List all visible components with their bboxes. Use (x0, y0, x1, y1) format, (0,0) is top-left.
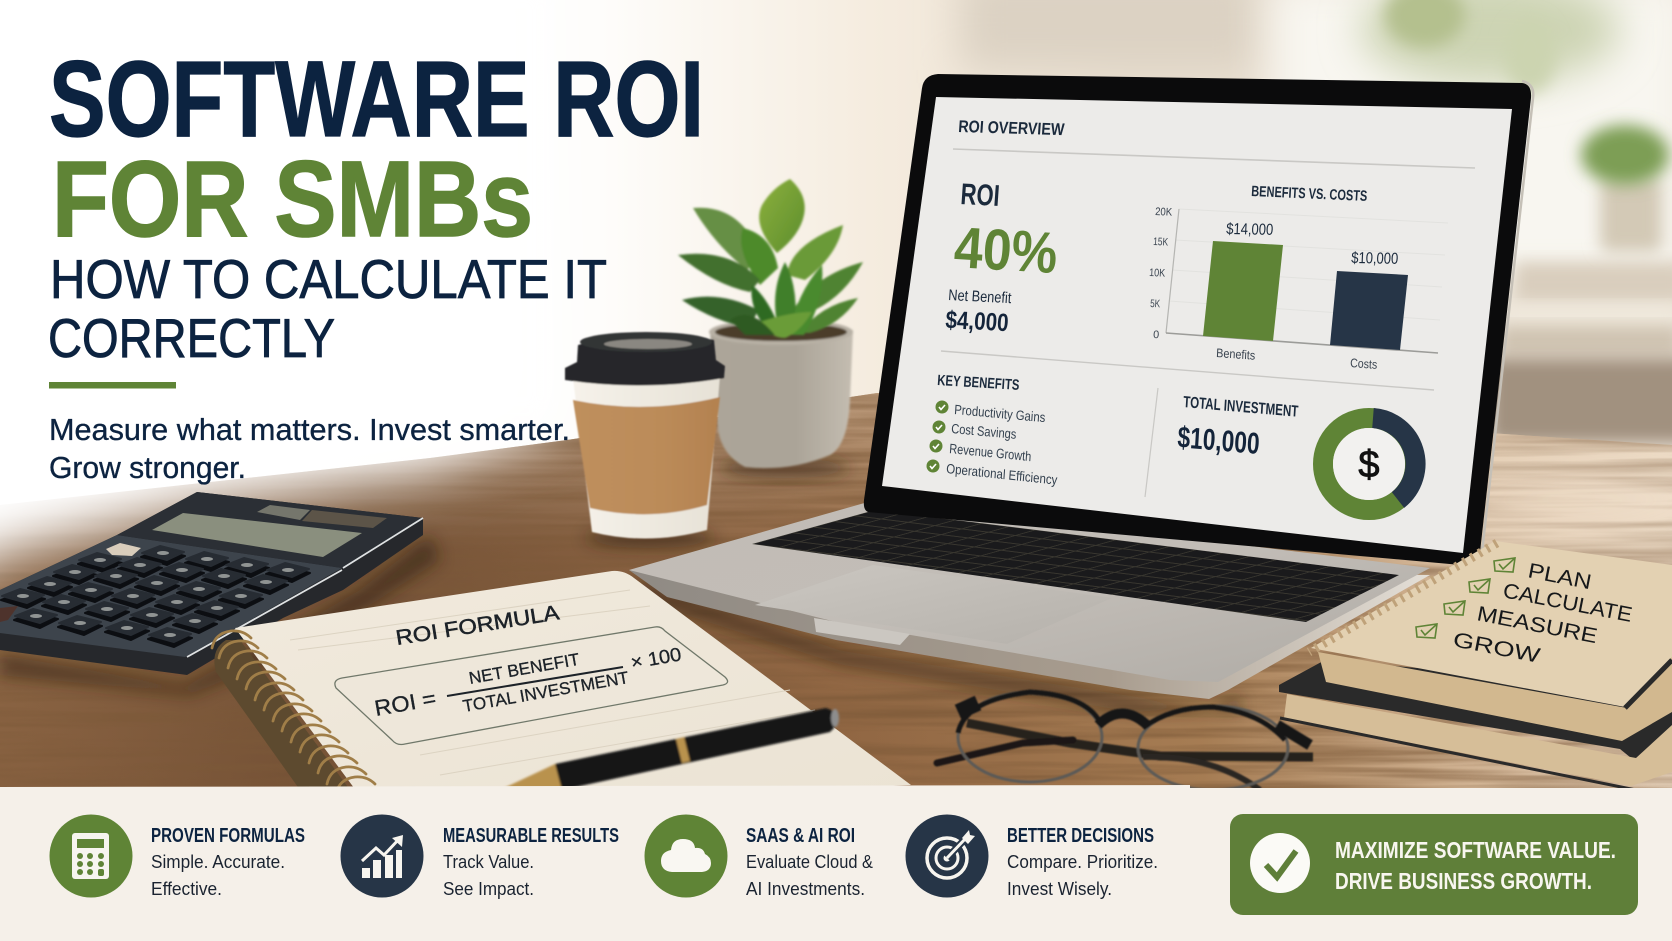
notebook with ROI formula (212, 571, 911, 800)
checklist: CALCULATE (1501, 579, 1634, 627)
laptop (629, 74, 1533, 699)
feature: SaaS and AI ROI: AI Investments. (746, 878, 865, 899)
bar chart: benefits vs costs: 10K (1149, 267, 1166, 280)
laptop bezel (864, 74, 1531, 566)
subtitle: CORRECTLY (48, 307, 335, 369)
bar chart: benefits vs costs: $10,000 (1351, 250, 1399, 268)
total investment (1177, 393, 1299, 461)
icon: check mark (1250, 833, 1310, 893)
total investment: $10,000 (1177, 421, 1261, 461)
icon: target (906, 814, 988, 898)
feature: measurable results (340, 814, 619, 899)
plant pot (709, 319, 853, 468)
tagline: Measure what matters. Invest smarter. (49, 412, 570, 447)
subtitle (48, 248, 607, 369)
bar chart: benefits vs costs: 0 (1153, 329, 1159, 341)
icon: calculator (50, 814, 132, 898)
feature: better decisions: BETTER DECISIONS (1007, 824, 1154, 847)
top book cover (1311, 541, 1672, 707)
feature: measurable results: Track Value. (443, 851, 534, 872)
checklist: MEASURE (1475, 602, 1599, 648)
feature: better decisions (906, 814, 1158, 899)
checklist: PLAN (1526, 559, 1593, 594)
laptop screen (882, 97, 1512, 553)
calculator keys (0, 543, 310, 647)
feature: SaaS and AI ROI: SAAS & AI ROI (746, 824, 855, 847)
top book pages (1318, 652, 1672, 741)
feature: better decisions: Invest Wisely. (1007, 878, 1112, 899)
key benefits list: Cost Savings (951, 421, 1017, 442)
laptop trackpad (755, 565, 1112, 645)
ROI stat: $4,000 (945, 306, 1010, 337)
bar chart: benefits vs costs: Benefits (1216, 346, 1256, 363)
key benefits list: KEY BENEFITS (937, 372, 1020, 394)
bar chart: benefits vs costs: 15K (1153, 236, 1169, 249)
calculator (0, 492, 423, 675)
bar chart: benefits vs costs: Costs (1350, 356, 1378, 372)
bar chart: benefits vs costs: BENEFITS VS. COSTS (1251, 183, 1368, 205)
stacked books (1279, 541, 1672, 790)
feature: measurable results: See Impact. (443, 878, 534, 899)
title line 2: FOR SMBs (52, 138, 533, 259)
plant (678, 179, 863, 468)
feature: proven formulas: Effective. (151, 878, 222, 899)
formula text: TOTAL INVESTMENT (461, 668, 630, 716)
key benefits list (926, 372, 1058, 488)
donut chart: $ (1358, 444, 1380, 486)
eyeglasses (937, 692, 1313, 790)
call to action (1230, 814, 1638, 915)
screen heading: ROI overview: ROI OVERVIEW (958, 117, 1066, 139)
formula text: × 100 (629, 644, 683, 674)
coffee cup (565, 332, 725, 539)
ROI stat: Net Benefit (948, 287, 1012, 307)
bar chart: benefits vs costs (1149, 183, 1448, 372)
lower book (1279, 660, 1672, 790)
book spiral binding (1309, 543, 1497, 652)
formula text: NET BENEFIT (467, 650, 581, 688)
bottom band (0, 785, 1672, 941)
bar chart: benefits vs costs: 5K (1150, 298, 1161, 310)
call to action: MAXIMIZE SOFTWARE VALUE. (1335, 837, 1616, 863)
formula text (373, 644, 683, 721)
checklist (1416, 558, 1634, 668)
feature: SaaS and AI ROI: Evaluate Cloud & (746, 851, 874, 872)
ROI stat: 40% (952, 215, 1060, 286)
formula box (335, 627, 728, 744)
background: blurred window plant (1581, 125, 1669, 252)
notebook spiral binding (212, 631, 375, 794)
wooden desk (0, 393, 1672, 788)
subtitle: HOW TO CALCULATE IT (50, 248, 607, 310)
call to action: DRIVE BUSINESS GROWTH. (1335, 868, 1592, 894)
bar chart: benefits vs costs: $14,000 (1226, 221, 1274, 239)
pen (504, 708, 839, 790)
laptop keyboard (752, 510, 1399, 622)
title line 1: SOFTWARE ROI (49, 38, 704, 159)
cup lid (565, 334, 725, 386)
tagline (49, 412, 570, 485)
feature: proven formulas (50, 814, 305, 899)
checklist: GROW (1451, 628, 1542, 668)
icon: cloud (644, 814, 728, 898)
icon: growth chart (340, 814, 424, 898)
plant leaves (678, 179, 863, 338)
total investment: TOTAL INVESTMENT (1183, 393, 1299, 421)
laptop base (629, 500, 1430, 699)
bar chart: benefits vs costs: 20K (1155, 206, 1173, 219)
feature: proven formulas: PROVEN FORMULAS (151, 824, 305, 847)
key benefits list: Revenue Growth (949, 441, 1032, 464)
cup sleeve (573, 397, 720, 514)
key benefits list: Productivity Gains (954, 402, 1046, 425)
feature: SaaS and AI ROI (644, 814, 874, 899)
feature: better decisions: Compare. Prioritize. (1007, 851, 1158, 872)
calculator display (152, 513, 362, 557)
formula title: ROI FORMULA (394, 601, 561, 650)
formula text: ROI = (373, 686, 438, 721)
object shadows on desk (0, 458, 1240, 712)
white fade over the left of the desk (0, 0, 555, 600)
ROI stat: ROI (960, 178, 1001, 213)
donut chart (1323, 418, 1416, 510)
title block (48, 38, 704, 485)
tagline: Grow stronger. (49, 450, 246, 485)
ROI stat (945, 178, 1060, 337)
key benefits list: Operational Efficiency (946, 461, 1058, 488)
feature: measurable results: MEASURABLE RESULTS (443, 824, 619, 847)
feature: proven formulas: Simple. Accurate. (151, 851, 285, 872)
